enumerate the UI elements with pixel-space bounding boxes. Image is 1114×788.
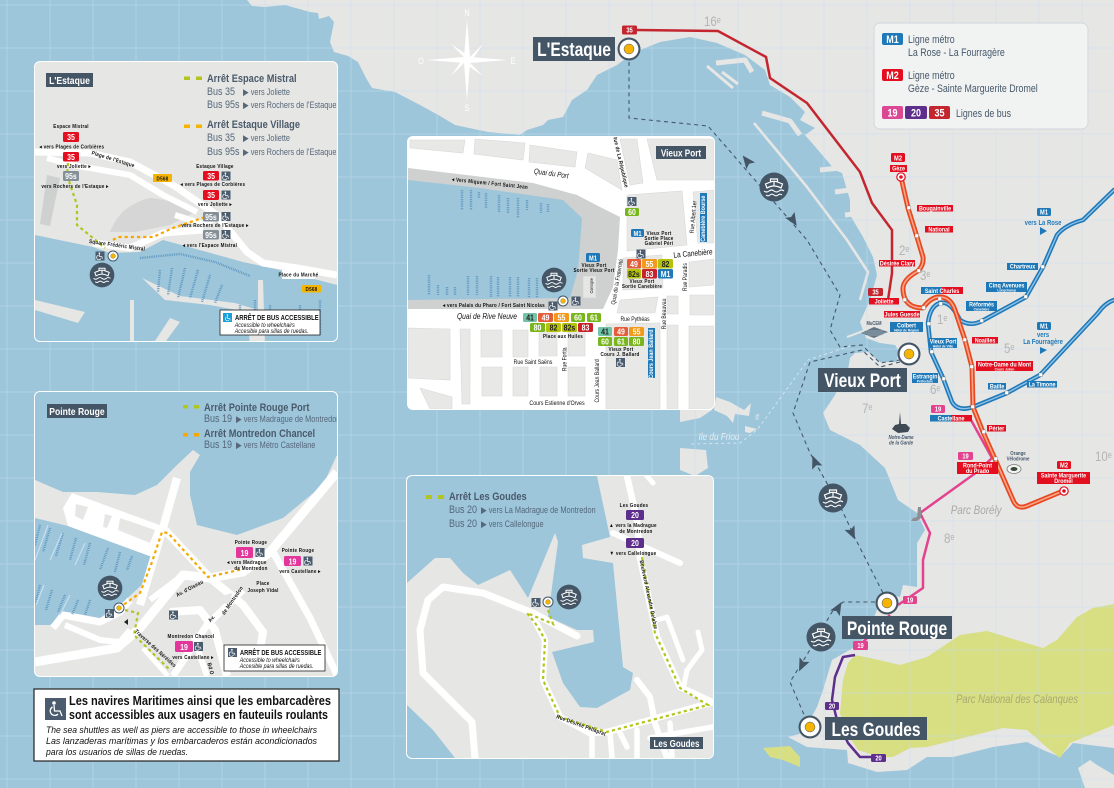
landmarks [861, 321, 1030, 521]
stop group Montredon Chancel: Montredon Chancel [168, 634, 215, 640]
note: wheelchair accessibility [34, 689, 339, 761]
bus badges Place aux Huiles: 80 [534, 323, 541, 333]
Frioul dashed route [690, 346, 850, 444]
metro red station labels: M2 [894, 155, 902, 162]
street labels: Rue Fortia [562, 347, 569, 371]
arrondissement labels [704, 13, 1112, 546]
metro red station labels [868, 153, 1090, 485]
national park [840, 604, 1114, 758]
L'Estaque title: L'Estaque [49, 75, 90, 87]
ferry route: Estaque to Vieux Port [629, 62, 900, 363]
legend stop Espace Mistral [184, 73, 337, 111]
stop group Estaque Village: 35 [207, 171, 216, 181]
metro M1 line [928, 190, 1114, 409]
metro blue station labels: Chartreux [1010, 264, 1036, 271]
metro red station labels: Cours Julien [995, 367, 1014, 371]
bus badges Sortie Canebière: 82 [662, 259, 670, 269]
bus badges Place aux Huiles: 83 [582, 323, 590, 333]
accessible bus note: ARRÊT DE BUS ACCESSIBLE [235, 312, 319, 322]
arrondissement labels: e [926, 269, 931, 279]
bus badges Cours J. Ballard: 60 [601, 337, 609, 347]
accessible bus note: Accessible to wheelchairs [239, 658, 300, 664]
legend stop Pointe Rouge Port: Arrêt Pointe Rouge Port [204, 402, 310, 414]
main stop: Les Goudes [798, 702, 927, 763]
icon: stop and ferry [542, 268, 580, 310]
street labels [555, 560, 659, 738]
bus badges Place aux Huiles: 82 [550, 323, 558, 333]
street labels: de Montredon [221, 585, 245, 616]
main stop: L'Estaque [533, 26, 640, 61]
stop group Les Goudes: Les Goudes [620, 503, 648, 509]
legend: 20 [911, 108, 921, 120]
metro red station labels: Castellane [938, 416, 965, 423]
metro blue station labels: M1 [1040, 323, 1048, 331]
arrondissement labels: 7 [862, 400, 868, 416]
metro exits: Sortie Place [644, 236, 674, 242]
metro blue station labels: Préfecture [917, 379, 933, 383]
legend stop Les Goudes: Bus 20 [449, 504, 477, 516]
legend stop Espace Mistral: ▶ vers Joliette [243, 87, 290, 97]
stop group Estaque Village: 35 [207, 190, 216, 200]
legend stop Estaque Village: Arrêt Estaque Village [207, 119, 300, 131]
street labels: Cours Jean Ballard [595, 359, 601, 402]
street labels: Traverse des Néréides [133, 628, 177, 669]
stop group Pointe Rouge inbound: 19 [241, 548, 249, 558]
bus badges Place aux Huiles: 41 [526, 313, 535, 323]
ferry arrows [738, 152, 860, 674]
main stop: Pointe Rouge: Pointe Rouge [847, 618, 947, 639]
main stop: Pointe Rouge: 19 [857, 643, 864, 650]
compass rose: S [465, 103, 470, 113]
legend stop Montredon Chancel [183, 429, 315, 449]
stop group Pointe Rouge outbound: vers Castellane ▸ [279, 569, 321, 575]
arrondissement labels: e [1010, 342, 1015, 352]
stop group Pointe Rouge inbound: de Montredon [234, 566, 268, 572]
islet [763, 746, 800, 767]
metro station dots [903, 206, 1044, 460]
compass rose: N [464, 8, 470, 18]
metro exits: Vieux Port [581, 263, 607, 269]
bus badges Place aux Huiles: 61 [590, 313, 599, 323]
metro red station labels: Périer [989, 426, 1005, 433]
metro red station labels: Gèze [892, 166, 906, 173]
arrondissement labels: 10 [1095, 448, 1108, 464]
street label bars: Canebière Bourse [701, 195, 707, 242]
arrondissement labels: 16 [704, 13, 717, 29]
panel: L'Estaque [34, 61, 338, 345]
metro red station labels: Notre-Dame du Mont [978, 362, 1031, 369]
legend stop Espace Mistral: Arrêt Espace Mistral [207, 73, 297, 85]
street labels [133, 579, 279, 676]
metro red station labels: Dromel [1054, 478, 1073, 485]
legend: 35 [935, 108, 945, 120]
accessible bus note: Accesible para sillas de ruedas. [234, 329, 309, 335]
city blocks [408, 139, 714, 409]
bus line 35 [637, 30, 892, 300]
metro red station labels: Sainte Marguerite [1041, 473, 1087, 479]
metro blue station labels: Estrangin [913, 374, 938, 381]
stop group Espace Mistral: 35 [67, 152, 76, 162]
bus badges Sortie Canebière [622, 250, 673, 290]
panel: Les Goudes [406, 475, 714, 759]
stop group Espace Mistral [39, 124, 109, 190]
stop group Espace Mistral: 35 [67, 132, 76, 142]
bus badges Sortie Canebière: M1 [661, 269, 671, 279]
icon: ferry ship Goudes route [806, 622, 836, 652]
arrondissement labels: e [936, 383, 941, 393]
arrondissement labels: 1 [937, 311, 943, 327]
land mass [247, 0, 1114, 772]
metro blue station labels: La Fourragère [1023, 339, 1063, 346]
icon: stop and ferry [532, 585, 581, 609]
metro red station labels: Saint Charles [925, 288, 960, 295]
metro blue station labels: Longchamp [997, 288, 1017, 292]
icon: ferry ship Vieux Port route [818, 484, 848, 512]
metro blue station labels: Hôtel de Région [894, 328, 919, 332]
street labels: Consigne [589, 277, 594, 293]
Les Goudes title: Les Goudes [654, 738, 699, 749]
legend: 19 [888, 108, 898, 120]
metro red station labels: Désirée Clary [880, 261, 915, 268]
legend stop Les Goudes: ▶ vers Callelongue [481, 519, 544, 529]
street labels: Joseph Vidal [247, 588, 279, 594]
road labels: Place du Marché [279, 272, 318, 279]
arrondissement labels: 6 [930, 381, 936, 397]
bus badges Sortie Canebière: 83 [646, 269, 654, 279]
metro blue station labels: vers La Rose [1025, 220, 1062, 227]
stop group Estaque Village: 95s [205, 230, 217, 240]
metro red station labels: 35 [872, 289, 879, 297]
arrondissement labels: 3 [920, 267, 926, 283]
bus badges Place aux Huiles [523, 313, 601, 340]
metro exits: Sortie Vieux Port [573, 268, 615, 274]
stop group Estaque Village [180, 164, 249, 249]
arrondissement labels: e [1108, 450, 1112, 460]
icon: stop and ferry [98, 576, 128, 625]
legend stop Estaque Village: ▶ vers Joliette [243, 133, 290, 143]
Pointe Rouge title: Pointe Rouge [49, 406, 105, 418]
street labels: Boulevard Alexandre Delabre [637, 560, 659, 630]
legend: M2 [886, 70, 899, 82]
metro M2 line [901, 177, 1063, 507]
metro exits: 60 [628, 207, 636, 217]
Vieux Port title [656, 146, 706, 159]
bus badges Place aux Huiles: 60 [574, 313, 582, 323]
metro blue station labels: La Timone [1029, 382, 1056, 389]
arrondissement labels: 8 [944, 530, 950, 546]
Frioul islands [680, 397, 757, 476]
park labels: Ile du Friou [699, 431, 739, 442]
stop group Les Goudes: de Montredon [619, 529, 653, 535]
street labels: Av. d'Oiseau [175, 579, 205, 599]
arrondissement labels: 2 [899, 242, 905, 258]
main stop: Pointe Rouge [842, 592, 952, 650]
legend stop Estaque Village: Bus 95s [207, 146, 240, 158]
main stop: Les Goudes: 20 [829, 703, 836, 711]
legend stop Estaque Village [184, 119, 337, 158]
metro blue station labels [890, 208, 1063, 391]
ferry route: Vieux Port to Pointe Rouge [793, 350, 900, 593]
accessible bus note: Accesible para sillas de ruedas. [239, 664, 314, 670]
bus badges Cours J. Ballard: 49 [617, 327, 626, 337]
stop group Les Goudes: ▼ vers Callelongue [610, 551, 656, 557]
stop group Estaque Village: vers Rochers de l'Estaque ▸ [181, 223, 249, 229]
metro red station labels: Joliette [875, 299, 894, 306]
metro red station labels: Noailles [975, 338, 996, 345]
compass rose [418, 8, 516, 113]
main stop: Pointe Rouge: 19 [907, 597, 914, 605]
park labels: Parc Borély [951, 504, 1003, 517]
icon: ferry ship Estaque route [760, 172, 788, 202]
stop group Estaque Village: vers Joliette ▸ [198, 202, 232, 208]
street labels: Rue Beauvau [662, 299, 668, 329]
legend stop Estaque Village: Bus 35 [207, 132, 235, 144]
note: wheelchair accessibility: para los usuarios de sillas de ruedas. [45, 746, 188, 757]
panel: Vieux Port [407, 135, 715, 410]
accessible bus note [220, 310, 320, 335]
street labels: Rue de La République [611, 135, 629, 188]
metro blue station labels: Baille [990, 384, 1005, 391]
stop group Montredon Chancel: 19 [180, 642, 189, 652]
legend [874, 23, 1088, 129]
street labels: Rue Albert 1er [689, 200, 699, 233]
landmarks: MuCEM [867, 321, 882, 326]
street labels: Rue Pythéas [620, 317, 650, 323]
bus badges Place aux Huiles: 55 [558, 313, 566, 323]
street labels: Av. [207, 614, 217, 624]
legend stop Montredon Chancel: ▶ vers Métro Castellane [236, 440, 316, 450]
bus badges Place aux Huiles: 82s [564, 323, 575, 333]
road labels: Square Frédéric Mistral [89, 239, 146, 253]
stop group Estaque Village: Estaque Village [196, 164, 234, 170]
landmarks: Orange [1010, 451, 1026, 457]
street labels [442, 135, 713, 407]
stop group Montredon Chancel: vers Castellane ▸ [172, 655, 214, 661]
arrondissement labels: e [717, 15, 721, 25]
arrondissement labels: e [868, 402, 873, 412]
boat moorings [429, 190, 548, 298]
bus badges Sortie Canebière: Vieux Port [629, 279, 655, 285]
legend: Ligne métro [908, 34, 955, 46]
street labels: Rue Saint Saëns [514, 360, 552, 366]
legend stop Les Goudes: ▶ vers La Madrague de Montredon [481, 505, 596, 515]
legend stop Pointe Rouge Port: ▶ vers Madrague de Montredon [236, 414, 341, 424]
stop group Estaque Village: ◂ vers Plages de Corbières [180, 182, 245, 188]
legend stop Les Goudes: Arrêt Les Goudes [449, 491, 527, 503]
bus badges Cours J. Ballard: 55 [633, 327, 641, 337]
metro blue station labels: M1 [1040, 209, 1048, 217]
street label bars [648, 193, 707, 379]
street labels: La Canebière [673, 247, 713, 260]
stop group Les Goudes: 20 [631, 538, 639, 548]
bus badges Cours J. Ballard: Vieux Port [608, 347, 634, 353]
stop group Les Goudes: ▲ vers la Madrague [609, 523, 657, 529]
road labels: D568 [306, 287, 317, 293]
bus badges Cours J. Ballard [598, 327, 644, 367]
legend: M1 [886, 34, 899, 46]
main stop: Les Goudes: Les Goudes [831, 719, 921, 740]
street label bars: Cours Jean Ballard [648, 329, 655, 379]
landmarks: Vélodrome [1007, 456, 1030, 463]
legend stop Pointe Rouge Port: Bus 19 [204, 413, 232, 425]
icon: stop and ferry [90, 250, 118, 287]
compass rose: E [511, 56, 516, 66]
metro red station labels: National [928, 227, 950, 234]
bus badges Sortie Canebière: 55 [646, 259, 654, 269]
road labels: Plage de l'Estaque [91, 150, 135, 170]
road labels [89, 150, 321, 293]
arrondissement labels: 5 [1004, 340, 1010, 356]
note: wheelchair accessibility: The sea shuttles as well as piers are accessible to those in wheelchairs [46, 724, 317, 735]
stop group Pointe Rouge outbound: Pointe Rouge [282, 548, 314, 554]
accessible bus note: Accessible to wheelchairs [234, 323, 295, 329]
bus badges Sortie Canebière: 82s [628, 269, 640, 279]
street labels: ◂ Vers Miquem / Fort Saint Jean [451, 177, 528, 191]
bus badges Sortie Canebière: Sortie Canebière [622, 284, 662, 290]
stop group Estaque Village: ◂ vers l'Espace Mistral [182, 243, 237, 249]
legend stop Pointe Rouge Port [183, 403, 337, 424]
metro red station labels: 19 [962, 453, 969, 461]
bus badges Cours J. Ballard: 41 [601, 327, 610, 337]
metro red station labels: Bougainville [919, 206, 952, 213]
stop group Pointe Rouge inbound: Pointe Rouge [235, 540, 267, 546]
south-east cape [1078, 760, 1114, 788]
park labels [699, 412, 1079, 706]
main stop: L'Estaque: L'Estaque [537, 39, 611, 60]
main stop: Vieux Port: Vieux Port [824, 370, 901, 391]
stop group Pointe Rouge outbound [279, 548, 321, 575]
bus badges Place aux Huiles: 49 [542, 313, 550, 323]
ferry route: Pointe Rouge to Les Goudes [790, 602, 875, 717]
legend: La Rose - La Fourragère [908, 47, 1005, 59]
note: wheelchair accessibility: sont accessibles aux usagers en fauteuils roulants [69, 708, 328, 722]
street labels: Place [256, 581, 270, 587]
legend stop Estaque Village: ▶ vers Rochers de l'Estaque [243, 147, 337, 157]
metro blue station labels: Réformés [969, 302, 995, 309]
stop group Pointe Rouge inbound: ◂ vers Madrague [226, 560, 267, 566]
metro red station labels: Rond-Point [963, 463, 992, 469]
arrondissement labels: e [905, 244, 910, 254]
metro blue station labels: Colbert [897, 323, 916, 330]
bus badges Cours J. Ballard: 61 [617, 337, 626, 347]
street labels: ◂ vers Palais du Pharo / Fort Saint Nicolas [442, 303, 545, 309]
bus badges Cours J. Ballard: Cours J. Ballard [600, 352, 640, 358]
legend stop Espace Mistral: ▶ vers Rochers de l'Estaque [243, 100, 337, 110]
metro exits: Gabriel Péri [645, 241, 674, 247]
legend stop Montredon Chancel: Bus 19 [204, 439, 232, 451]
street labels: Quai de Rive Neuve [457, 311, 517, 321]
park labels: Parc National des Calanques [956, 693, 1079, 706]
note: wheelchair accessibility: Las lanzaderas marítimas y los embarcaderos están acondicionados [46, 735, 317, 746]
metro exits: Vieux Port [646, 231, 672, 237]
street labels: Cours Estienne d'Orves [529, 401, 585, 407]
legend stop Espace Mistral: Bus 95s [207, 99, 240, 111]
stop group Pointe Rouge inbound [226, 540, 268, 572]
stop group Espace Mistral: 95s [65, 171, 77, 181]
street labels: Rue Désirée Pellaprat [555, 714, 607, 738]
legend: Ligne métro [908, 70, 955, 82]
metro red station labels: M2 [1060, 462, 1068, 470]
bus badges Place aux Huiles: Place aux Huiles [543, 334, 583, 340]
stop group Les Goudes: 20 [631, 510, 639, 520]
Vieux Port title: Vieux Port [661, 148, 701, 159]
legend stop Les Goudes [426, 491, 596, 530]
stop group Les Goudes [609, 503, 657, 557]
stop group Pointe Rouge outbound: 19 [289, 557, 297, 567]
arrondissement labels: e [943, 313, 948, 323]
stop group Espace Mistral: Espace Mistral [53, 124, 89, 130]
metro blue station labels: vers [1037, 332, 1049, 339]
legend: Gèze - Sainte Marguerite Dromel [908, 83, 1038, 95]
main stop: Les Goudes: 20 [875, 755, 882, 763]
legend stop Les Goudes: Bus 20 [449, 518, 477, 530]
main stop: L'Estaque: 35 [626, 27, 633, 35]
metro exits: M1 [589, 255, 597, 262]
metro red station labels: 19 [935, 406, 942, 414]
metro blue station labels: Hôtel de Ville [933, 344, 953, 348]
landmarks: Notre-Dame [889, 435, 914, 441]
metro exits [573, 197, 674, 274]
street labels: Bd O [205, 662, 215, 676]
note: wheelchair accessibility: Les navires Maritimes ainsi que les embarcadères [69, 694, 331, 708]
landmarks: de la Garde [889, 440, 913, 447]
main stop: Vieux Port [818, 342, 920, 392]
metro red station labels: du Prado [966, 468, 990, 475]
compass rose: O [418, 56, 424, 66]
bus badges Cours J. Ballard: 80 [633, 337, 640, 347]
metro blue station labels: Cinq Avenues [989, 283, 1025, 290]
metro blue station labels: Vieux Port [930, 339, 956, 346]
legend stop Espace Mistral: Bus 35 [207, 86, 235, 98]
stop group Espace Mistral: ◂ vers Plages de Corbières [39, 144, 104, 151]
port docks and breakwater [707, 60, 868, 337]
metro exits: M1 [634, 230, 642, 238]
legend: Lignes de bus [956, 108, 1011, 120]
metro terminal stops [897, 173, 1068, 495]
accessible bus note: ARRÊT DE BUS ACCESSIBLE [240, 647, 322, 657]
stop group Espace Mistral: vers Joliette ▸ [57, 164, 91, 170]
stop group Espace Mistral: vers Rochers de l'Estaque ▸ [41, 184, 109, 190]
road labels: D568 [157, 176, 168, 182]
bus badges Sortie Canebière: 49 [630, 259, 639, 269]
street labels: Rue Paradis [683, 263, 689, 291]
panel: Pointe Rouge [34, 391, 341, 677]
street labels: Quai du Port [533, 168, 570, 181]
bus line 20 [832, 655, 873, 757]
stop group Estaque Village: 95s [205, 212, 217, 222]
park labels: If [755, 412, 760, 422]
metro red station labels: Jules Guesde [885, 312, 920, 319]
metro blue station labels: Canebière [974, 307, 989, 311]
arrondissement labels: e [950, 532, 955, 542]
bus line 19 [860, 420, 992, 645]
street labels: Quai de la Fraternité [611, 259, 625, 305]
stop group Montredon Chancel [168, 634, 215, 661]
legend stop Montredon Chancel: Arrêt Montredon Chancel [204, 428, 315, 440]
accessible bus note [224, 645, 325, 671]
